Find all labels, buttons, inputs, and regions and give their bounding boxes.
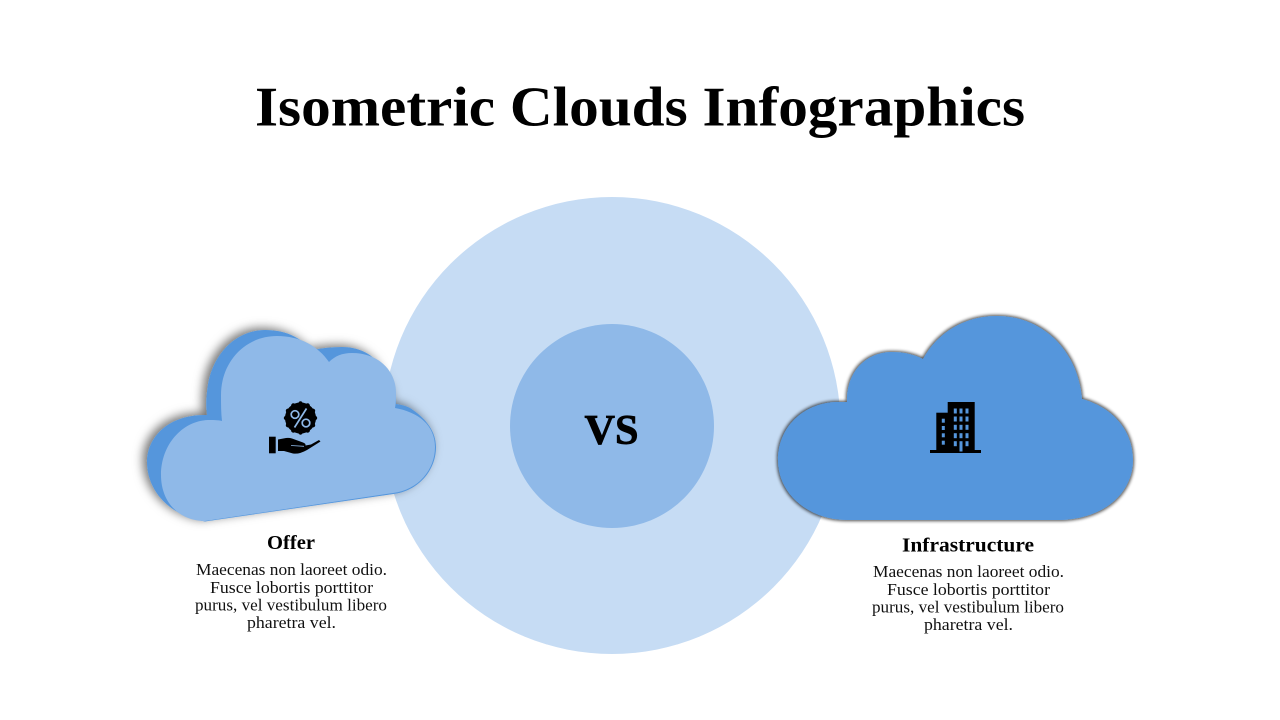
cloud side depth xyxy=(147,330,436,522)
icon: discount badge on hand xyxy=(269,401,320,454)
description: Offer: purus, vel vestibulum libero xyxy=(195,596,387,614)
right cloud xyxy=(778,316,1133,520)
description: Infrastructure xyxy=(872,562,1064,634)
description: Infrastructure: Maecenas non laoreet odio. xyxy=(873,562,1064,581)
cloud body xyxy=(778,316,1133,520)
title: Isometric Clouds Infographics xyxy=(255,76,1025,138)
outer circle xyxy=(384,197,840,654)
cloud front face xyxy=(161,336,435,521)
heading: Infrastructure: Infrastructure xyxy=(902,534,1034,556)
VS label: VS xyxy=(584,408,638,454)
icon: office building xyxy=(930,402,981,453)
description: Offer: Fusce lobortis porttitor xyxy=(210,578,374,597)
text block: Offer xyxy=(195,532,387,632)
description: Infrastructure: pharetra vel. xyxy=(924,615,1013,634)
description: Offer xyxy=(195,560,387,632)
description: Infrastructure: purus, vel vestibulum libero xyxy=(872,598,1064,616)
description: Offer: Maecenas non laoreet odio. xyxy=(196,560,387,579)
description: Infrastructure: Fusce lobortis porttitor xyxy=(887,580,1051,599)
left isometric cloud xyxy=(147,330,436,522)
description: Offer: pharetra vel. xyxy=(247,613,336,632)
text block: Infrastructure xyxy=(872,534,1064,634)
inner circle xyxy=(510,324,714,528)
heading: Offer: Offer xyxy=(267,532,315,554)
